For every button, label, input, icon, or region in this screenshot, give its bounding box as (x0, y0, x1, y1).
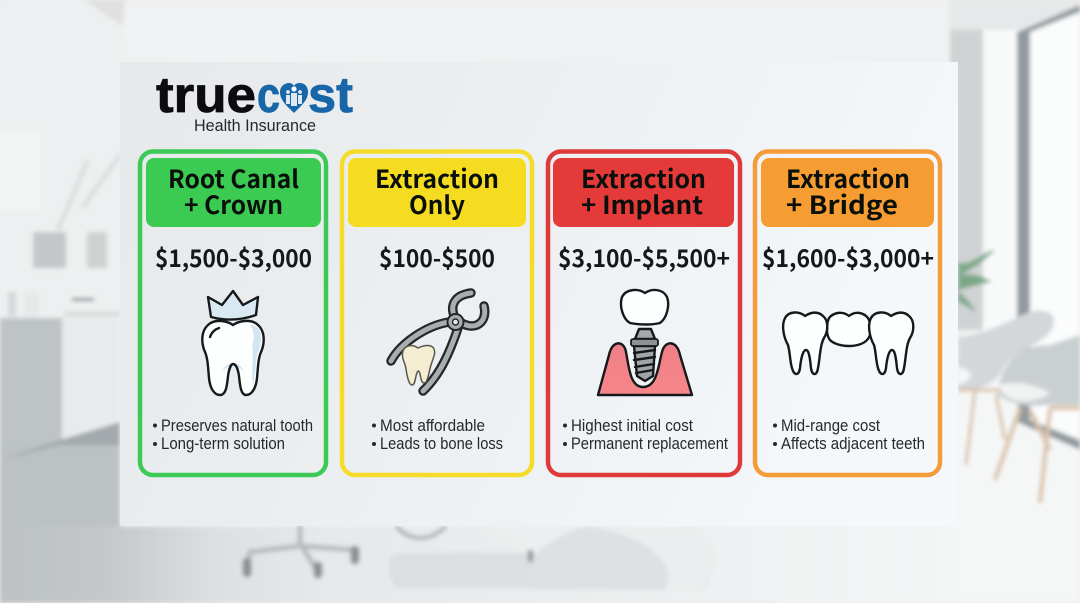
price: $1,600-$3,000+ (762, 239, 934, 274)
bullet list: Leads to bone loss (380, 435, 503, 453)
heading: Root Canal + Crown: Root Canal (168, 160, 299, 196)
bullet list (773, 417, 925, 453)
logo: truecost Health Insurance: true (156, 67, 256, 123)
bullet list (372, 417, 503, 453)
bullet list: Highest initial cost (571, 417, 693, 435)
heading: Extraction Only: Only (409, 186, 466, 222)
icon: extraction forceps with tooth (391, 293, 485, 391)
bullet list: Long-term solution (161, 435, 285, 453)
chairs (958, 311, 1054, 392)
icon: heart with family (280, 83, 308, 113)
price: $100-$500 (379, 239, 495, 274)
stool base (247, 526, 355, 572)
icon: dental implant (598, 290, 692, 395)
heading: Extraction + Bridge: + Bridge (786, 186, 898, 222)
heading: Extraction + Implant: Extraction (581, 160, 706, 196)
panel: Extraction + Bridge (755, 152, 940, 475)
icon: dental bridge (783, 312, 913, 374)
bullet list: Most affordable (380, 417, 485, 435)
bullet list: Mid-range cost (781, 417, 880, 435)
logo: truecost Health Insurance: c (257, 67, 280, 123)
plant (958, 250, 995, 312)
heading: Extraction Only: Extraction (375, 160, 499, 196)
bullet list: Preserves natural tooth (161, 417, 313, 435)
panel: white comparison board (120, 62, 958, 526)
panel: Extraction Only (342, 152, 532, 475)
bullet list: Affects adjacent teeth (781, 435, 925, 453)
logo: truecost Health Insurance: Health Insurance (194, 117, 316, 135)
heading: Extraction + Implant (553, 158, 734, 227)
bullet list (563, 417, 728, 453)
dental chair (389, 552, 530, 588)
bullet list (153, 417, 313, 453)
logo: truecost Health Insurance (156, 67, 353, 135)
heading: Root Canal + Crown: + Crown (184, 186, 283, 222)
heading: Extraction + Bridge (761, 158, 934, 227)
heading: Extraction Only (348, 158, 526, 227)
price: $3,100-$5,500+ (558, 239, 730, 274)
bullet list: Permanent replacement (571, 435, 728, 453)
panel: Root Canal + Crown (140, 152, 326, 475)
price: $1,500-$3,000 (155, 239, 312, 274)
panel: Extraction + Implant (548, 152, 740, 475)
icon: tooth with crown (202, 291, 264, 395)
heading: Extraction + Bridge: Extraction (786, 160, 910, 196)
heading: Extraction + Implant: + Implant (581, 186, 703, 222)
logo: truecost Health Insurance: st (308, 67, 353, 123)
heading: Root Canal + Crown (146, 158, 321, 227)
